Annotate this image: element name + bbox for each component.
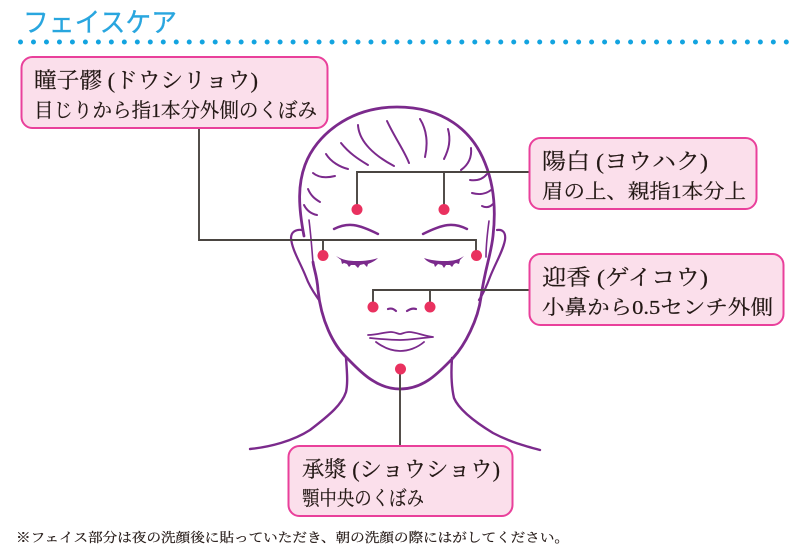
right ear xyxy=(479,230,505,300)
heading: 瞳子髎 (ドウシリョウ) xyxy=(34,68,258,93)
title: フェイスケア xyxy=(23,8,177,38)
inner temple lines xyxy=(309,220,489,263)
left eyebrow xyxy=(334,225,378,234)
dotted divider xyxy=(20,40,790,44)
panel: 承漿 xyxy=(288,446,512,516)
nose xyxy=(388,309,416,311)
description: 小鼻から0.5センチ外側 xyxy=(542,296,773,319)
right eye xyxy=(424,256,464,268)
acupoints xyxy=(318,204,482,374)
neck left xyxy=(250,358,347,449)
face illustration xyxy=(250,107,540,450)
leader lines: 瞳子髎 xyxy=(199,128,476,255)
left eye xyxy=(336,256,378,268)
heading: 迎香 (ゲイコウ) xyxy=(542,265,708,290)
head and jaw outline xyxy=(300,107,494,389)
leader lines: 迎香 xyxy=(373,290,529,307)
neck right xyxy=(451,358,540,450)
leader lines: 陽白 xyxy=(357,172,529,209)
description: 顎中央のくぼみ xyxy=(302,487,424,510)
footnote: ※フェイス部分は夜の洗顔後に貼っていただき、朝の洗顔の際にはがしてください。 xyxy=(16,530,569,545)
left ear xyxy=(291,230,319,300)
panel: 瞳子髎 xyxy=(22,57,328,128)
lower lip xyxy=(376,342,424,351)
heading: 承漿 (ショウショウ) xyxy=(302,457,500,482)
panel: 迎香 xyxy=(530,254,784,325)
description: 目じりから指1本分外側のくぼみ xyxy=(34,99,317,122)
right eyebrow xyxy=(423,225,467,234)
leader line: 承漿 xyxy=(399,369,401,446)
heading: 陽白 (ヨウハク) xyxy=(542,149,708,174)
description: 眉の上、親指1本分上 xyxy=(542,180,746,203)
hair strands xyxy=(304,119,493,215)
panel: 陽白 xyxy=(530,138,756,209)
lips xyxy=(368,332,433,340)
